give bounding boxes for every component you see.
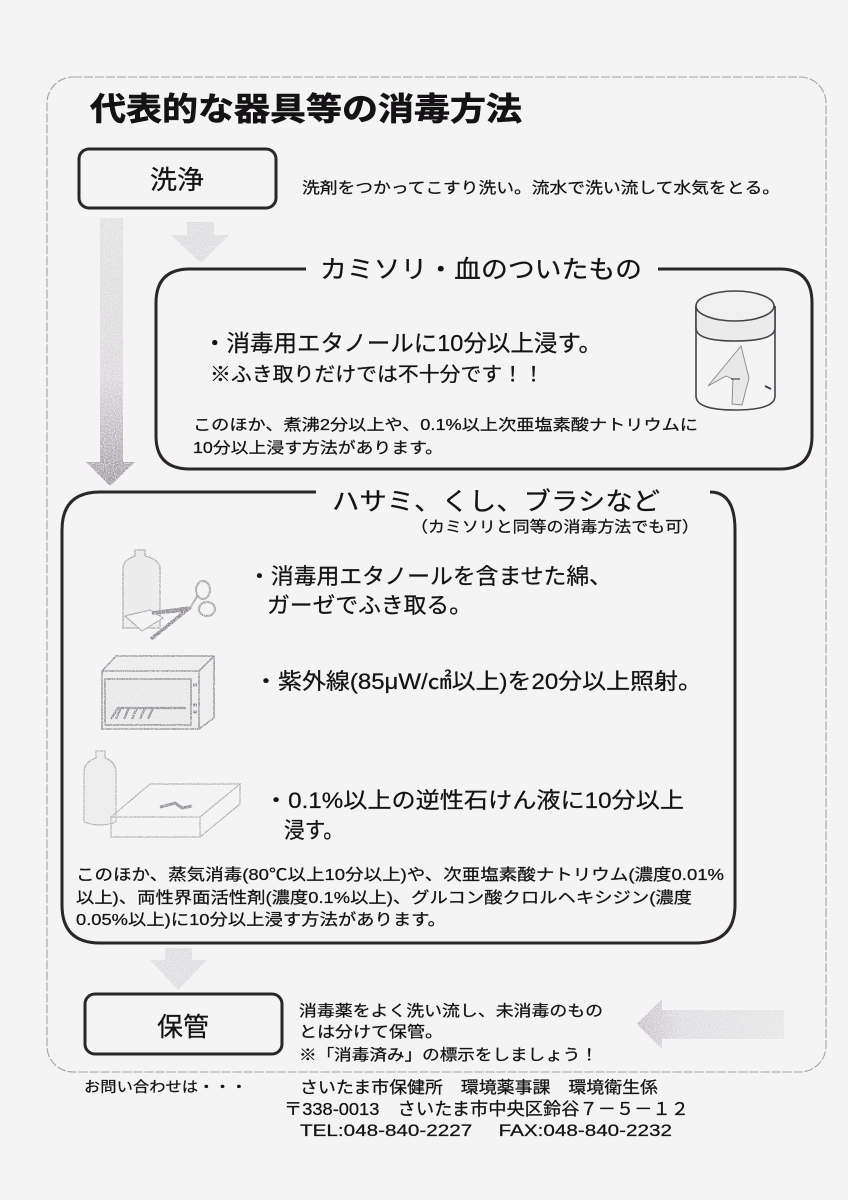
panel: washing step: 洗浄: [150, 165, 204, 195]
arrow: short down arrow to razor panel: [171, 222, 229, 263]
contact information: [84, 1078, 689, 1140]
arrow: long down arrow: [86, 218, 135, 486]
ethanol method: [248, 564, 612, 618]
contact information: お問い合わせは・・・: [84, 1079, 247, 1096]
razor alternative methods: このほか、煮沸2分以上や、0.1%以上次亜塩素酸ナトリウムに: [193, 416, 698, 434]
storage description: とは分けて保管。: [299, 1023, 443, 1041]
ethanol method: ・消毒用エタノールを含ませた綿、: [248, 564, 612, 589]
storage description: ※「消毒済み」の標示をしましょう！: [299, 1046, 598, 1064]
panel: storage step: 保管: [157, 1012, 209, 1042]
arrow: down arrow to storage: [150, 948, 207, 990]
contact information: TEL:048-840-2227 FAX:048-840-2232: [300, 1121, 672, 1140]
other methods: このほか、蒸気消毒(80℃以上10分以上)や、次亜塩素酸ナトリウム(濃度0.01%: [76, 866, 724, 884]
disinfectant soak method: ・0.1%以上の逆性石けん液に10分以上: [264, 788, 684, 813]
panel heading: razors: カミソリ・血のついたもの: [320, 256, 642, 284]
arrow: left arrow from drying: [637, 999, 784, 1049]
icon: bottle and scissors: [123, 550, 215, 639]
storage description: [299, 1002, 603, 1064]
razor warning: ※ふき取りだけでは不十分です！！: [210, 363, 544, 386]
washing description: 洗剤をつかってこすり洗い。流水で洗い流して水気をとる。: [302, 179, 780, 197]
panel heading: scissors: ハサミ、くし、ブラシなど: [332, 488, 660, 516]
icon: UV sterilizer cabinet: [102, 656, 214, 729]
razor alternative methods: [193, 416, 698, 457]
contact information: 〒338-0013 さいたま市中央区鈴谷７－５－１２: [284, 1099, 689, 1119]
other methods: 0.05%以上)に10分以上浸す方法があります。: [76, 911, 446, 929]
panel: scissors, combs, brushes: [62, 488, 735, 943]
panel: razors and blood-stained items: [156, 256, 812, 469]
panel subheading: （カミソリと同等の消毒方法でも可）: [411, 518, 699, 536]
disinfectant soak method: 浸す。: [284, 818, 344, 843]
icon: bottle and soaking tray: [84, 751, 240, 837]
disinfectant soak method: [264, 788, 684, 843]
contact information: さいたま市保健所 環境薬事課 環境衛生係: [300, 1078, 659, 1097]
ultraviolet method: ・紫外線(85μW/㎠以上)を20分以上照射。: [254, 669, 702, 694]
panel: storage step: [85, 994, 282, 1054]
panel: washing step: [79, 149, 276, 208]
other methods: [76, 866, 724, 929]
other methods: 以上)、両性界面活性剤(濃度0.1%以上)、グルコン酸クロルヘキシジン(濃度: [76, 889, 692, 907]
razor alternative methods: 10分以上浸す方法があります。: [193, 439, 443, 457]
storage description: 消毒薬をよく洗い流し、未消毒のもの: [299, 1002, 603, 1020]
ethanol method: ガーゼでふき取る。: [267, 593, 472, 618]
page frame: [47, 77, 826, 1072]
icon: jar with razor: [696, 291, 775, 410]
razor instruction: ・消毒用エタノールに10分以上浸す。: [203, 330, 602, 356]
title: 代表的な器具等の消毒方法: [90, 91, 522, 127]
